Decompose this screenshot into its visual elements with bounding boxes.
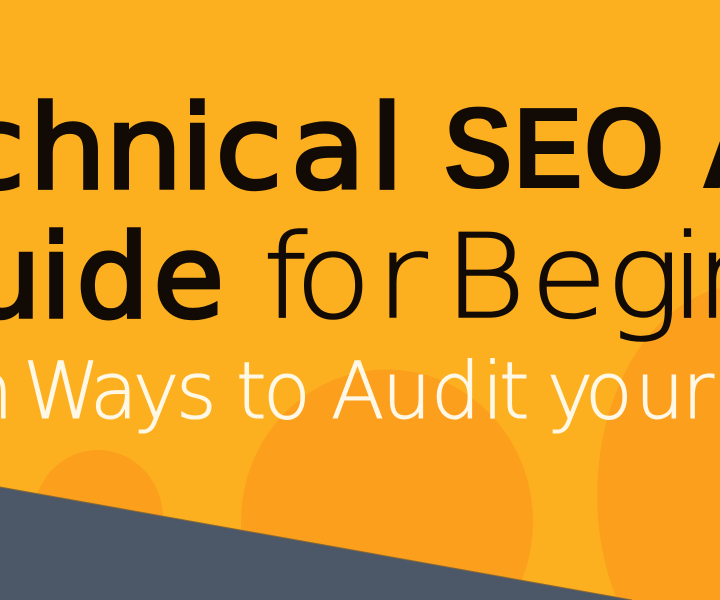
title line 2	[0, 210, 720, 345]
title line 1	[0, 81, 720, 216]
decorative orange circles	[33, 288, 720, 600]
slate diagonal panel	[0, 487, 632, 600]
title line 1: SEO	[443, 83, 665, 213]
title line 2: for	[263, 210, 428, 345]
